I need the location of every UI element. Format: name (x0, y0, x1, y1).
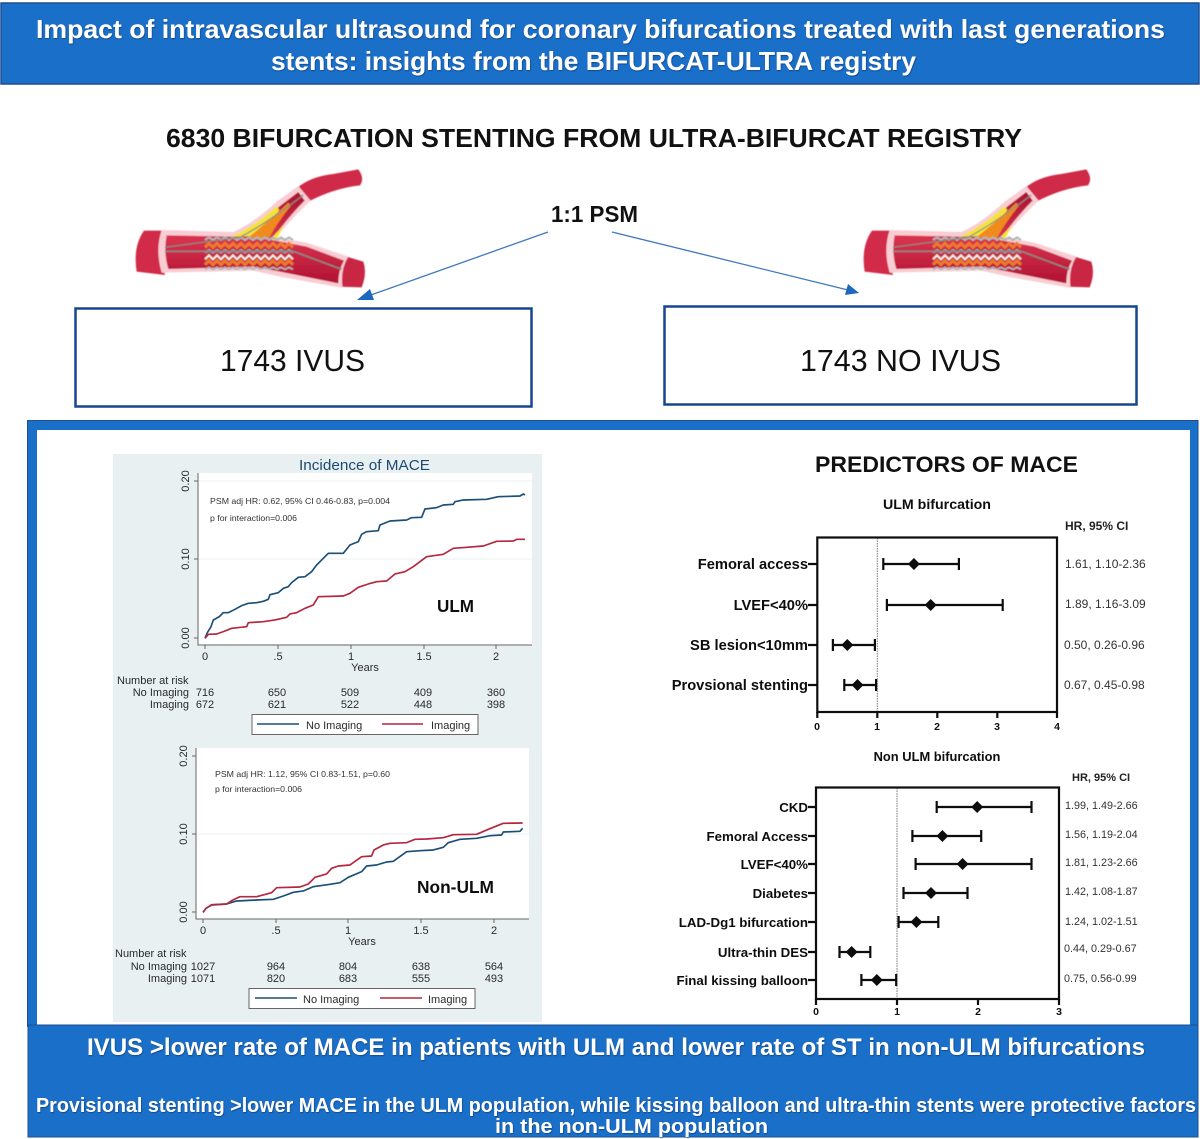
chart: non-ULM incidence of MACE: Imaging (428, 994, 467, 1006)
chart: ULM forest plot: 3 (994, 721, 1000, 733)
chart: ULM forest plot: 0.50, 0.26-0.96 (1064, 638, 1145, 652)
box: no IVUS arm: 1743 NO IVUS (800, 343, 1001, 378)
heading: predictors of MACE: PREDICTORS OF MACE (815, 452, 1078, 477)
chart: non-ULM incidence of MACE: 555 (412, 973, 430, 985)
chart: ULM incidence of MACE: Years (351, 662, 379, 674)
chart: non-ULM incidence of MACE: 1027 (191, 961, 215, 973)
chart: ULM forest plot (672, 497, 1146, 733)
panel: Kaplan-Meier curves (113, 454, 542, 1022)
chart: non-ULM forest plot: 1 (894, 1006, 900, 1018)
chart: ULM incidence of MACE: .5 (273, 651, 283, 663)
chart: ULM forest plot: SB lesion<10mm (690, 638, 808, 654)
chart: non-ULM incidence of MACE: Years (348, 936, 376, 948)
title (36, 14, 1165, 76)
chart: non-ULM incidence of MACE: 493 (485, 973, 503, 985)
chart: ULM incidence of MACE: 0.00 (180, 627, 192, 649)
panel: results (28, 420, 1198, 1026)
chart: ULM forest plot: 0 (814, 721, 820, 733)
chart: ULM forest plot: 1 (874, 721, 880, 733)
chart: non-ULM forest plot: Diabetes (753, 886, 808, 901)
chart: non-ULM forest plot: 1.99, 1.49-2.66 (1065, 800, 1138, 812)
chart: non-ULM forest plot: 1.56, 1.19-2.04 (1065, 829, 1138, 841)
header banner (1, 3, 1199, 84)
chart: non-ULM incidence of MACE: 804 (339, 961, 357, 973)
chart: non-ULM incidence of MACE: 564 (485, 961, 503, 973)
chart: ULM forest plot: ULM bifurcation (883, 497, 991, 513)
chart: ULM incidence of MACE: 2 (493, 651, 499, 663)
chart: ULM incidence of MACE: 509 (341, 687, 359, 699)
chart: ULM forest plot: Provsional stenting (672, 678, 808, 694)
chart: non-ULM incidence of MACE: 0.10 (178, 823, 190, 845)
chart: non-ULM forest plot (676, 749, 1138, 1018)
icon: stented bifurcation left (136, 169, 365, 288)
chart: ULM forest plot: LVEF<40% (734, 598, 808, 614)
chart: ULM incidence of MACE: p for interaction=0.006 (210, 513, 297, 523)
chart: non-ULM forest plot: LVEF<40% (741, 857, 808, 872)
chart: non-ULM forest plot: 0 (813, 1006, 819, 1018)
chart: non-ULM incidence of MACE: 820 (267, 973, 285, 985)
chart: ULM incidence of MACE: 621 (268, 699, 286, 711)
chart: ULM forest plot: 2 (934, 721, 940, 733)
icon: stented bifurcation right (864, 169, 1093, 288)
chart: ULM incidence of MACE: 0.10 (180, 548, 192, 570)
chart: non-ULM forest plot: Non ULM bifurcation (874, 749, 1000, 764)
chart: non-ULM forest plot: CKD (779, 800, 808, 815)
chart: non-ULM incidence of MACE: 2 (491, 925, 497, 937)
chart: ULM incidence of MACE: Number at risk (117, 675, 189, 687)
chart: non-ULM incidence of MACE: 964 (267, 961, 285, 973)
chart: non-ULM forest plot: Femoral Access (706, 829, 808, 844)
box: no IVUS arm (664, 306, 1136, 404)
chart: ULM incidence of MACE: 409 (414, 687, 432, 699)
population heading: 6830 BIFURCATION STENTING FROM ULTRA-BIFURCAT REGISTRY (166, 125, 1022, 153)
chart: non-ULM forest plot: Ultra-thin DES (718, 945, 808, 960)
title: Impact of intravascular ultrasound for coronary bifurcations treated with last generations (36, 14, 1165, 44)
chart: non-ULM incidence of MACE: No Imaging (131, 961, 187, 973)
chart: non-ULM forest plot: 1.81, 1.23-2.66 (1065, 857, 1138, 869)
chart: non-ULM forest plot: 2 (975, 1006, 981, 1018)
chart: ULM incidence of MACE: 0.20 (180, 470, 192, 492)
conclusion banner (28, 1025, 1198, 1138)
chart: ULM incidence of MACE: Imaging (150, 699, 189, 711)
chart: non-ULM forest plot: 0.44, 0.29-0.67 (1064, 943, 1137, 955)
chart: ULM incidence of MACE: 0 (202, 651, 208, 663)
chart: non-ULM forest plot: Final kissing balloon (676, 973, 808, 988)
chart: non-ULM incidence of MACE: 0.00 (178, 901, 190, 923)
conclusion text: in the non-ULM population (495, 1115, 768, 1138)
chart: non-ULM incidence of MACE (115, 745, 529, 1008)
chart: non-ULM incidence of MACE: 638 (412, 961, 430, 973)
chart: non-ULM incidence of MACE: 0 (200, 925, 206, 937)
chart: ULM forest plot: Femoral access (698, 557, 808, 573)
chart: ULM incidence of MACE: Incidence of MACE (299, 457, 430, 474)
chart: non-ULM incidence of MACE: 1071 (191, 973, 215, 985)
matching label: 1:1 PSM (551, 201, 638, 227)
chart: non-ULM incidence of MACE: .5 (271, 925, 281, 937)
title: stents: insights from the BIFURCAT-ULTRA registry (271, 46, 917, 76)
chart: non-ULM incidence of MACE: Imaging (148, 973, 187, 985)
conclusion text (36, 1034, 1196, 1138)
chart: ULM incidence of MACE: 448 (414, 699, 432, 711)
chart: ULM incidence of MACE (117, 457, 532, 734)
chart: ULM incidence of MACE: 398 (487, 699, 505, 711)
chart: ULM incidence of MACE: 650 (268, 687, 286, 699)
chart: ULM incidence of MACE: 1 (348, 651, 354, 663)
chart: ULM incidence of MACE: No Imaging (133, 687, 189, 699)
chart: ULM incidence of MACE: PSM adj HR: 0.62, 95% CI 0.46-0.83, p=0.004 (210, 496, 390, 506)
chart: non-ULM forest plot: HR, 95% CI (1072, 772, 1130, 784)
chart: non-ULM incidence of MACE: Non-ULM (417, 877, 494, 897)
chart: ULM incidence of MACE: 716 (196, 687, 214, 699)
arrow: to IVUS arm (357, 232, 548, 300)
chart: non-ULM forest plot: LAD-Dg1 bifurcation (679, 915, 808, 930)
chart: ULM forest plot: 1.89, 1.16-3.09 (1065, 597, 1146, 611)
chart: ULM incidence of MACE: No Imaging (306, 720, 362, 732)
box: IVUS arm: 1743 IVUS (220, 343, 365, 378)
chart: ULM forest plot: 0.67, 0.45-0.98 (1064, 678, 1145, 692)
chart: non-ULM forest plot: 1.42, 1.08-1.87 (1065, 886, 1138, 898)
box: IVUS arm (76, 308, 532, 406)
chart: ULM incidence of MACE: ULM (437, 596, 474, 616)
chart: ULM forest plot: 1.61, 1.10-2.36 (1065, 557, 1146, 571)
chart: non-ULM forest plot: 3 (1056, 1006, 1062, 1018)
chart: non-ULM incidence of MACE: Number at risk (115, 948, 187, 960)
arrow: to no IVUS arm (612, 232, 859, 295)
chart: non-ULM incidence of MACE: 683 (339, 973, 357, 985)
chart: non-ULM incidence of MACE: 0.20 (178, 745, 190, 767)
chart: ULM incidence of MACE: 1.5 (416, 651, 432, 663)
chart: ULM incidence of MACE: Imaging (431, 720, 470, 732)
chart: non-ULM incidence of MACE: PSM adj HR: 1.12, 95% CI 0.83-1.51, p=0.60 (215, 769, 390, 779)
chart: ULM forest plot: 4 (1054, 721, 1060, 733)
chart: ULM incidence of MACE: 522 (341, 699, 359, 711)
chart: non-ULM incidence of MACE: No Imaging (303, 994, 359, 1006)
chart: ULM incidence of MACE: 360 (487, 687, 505, 699)
chart: ULM incidence of MACE: 672 (196, 699, 214, 711)
chart: non-ULM incidence of MACE: 1.5 (413, 925, 429, 937)
chart: non-ULM forest plot: 0.75, 0.56-0.99 (1064, 973, 1137, 985)
chart: non-ULM incidence of MACE: 1 (345, 925, 351, 937)
chart: non-ULM forest plot: 1.24, 1.02-1.51 (1065, 916, 1138, 928)
chart: non-ULM incidence of MACE: p for interaction=0.006 (215, 784, 302, 794)
conclusion text: IVUS >lower rate of MACE in patients with ULM and lower rate of ST in non-ULM bifurcations (87, 1034, 1145, 1061)
chart: ULM forest plot: HR, 95% CI (1065, 519, 1128, 533)
